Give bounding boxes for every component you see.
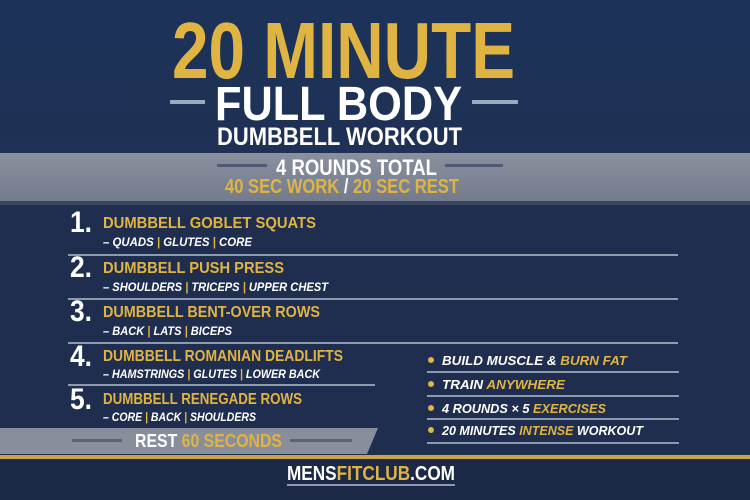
exercise 5: – CORE | BACK | SHOULDERS bbox=[103, 410, 256, 424]
exercise 4: 4. bbox=[70, 340, 92, 373]
exercise 2: DUMBBELL PUSH PRESS bbox=[103, 260, 284, 277]
benefits list: 20 MINUTES INTENSE WORKOUT bbox=[441, 423, 644, 438]
exercise 3: DUMBBELL BENT-OVER ROWS bbox=[103, 304, 320, 321]
title: 20 MINUTE bbox=[172, 6, 515, 95]
panel: rounds band: 4 ROUNDS TOTAL bbox=[276, 155, 437, 180]
exercise 1: 1. bbox=[70, 206, 92, 239]
benefits list: TRAIN ANYWHERE bbox=[442, 377, 565, 392]
exercise 2: – SHOULDERS | TRICEPS | UPPER CHEST bbox=[103, 280, 330, 294]
panel: rounds band bbox=[0, 153, 750, 205]
exercise 4: – HAMSTRINGS | GLUTES | LOWER BACK bbox=[103, 367, 321, 381]
title: DUMBBELL WORKOUT bbox=[217, 123, 462, 151]
benefits list bbox=[427, 353, 679, 444]
panel: rounds band: 40 SEC WORK / 20 SEC REST bbox=[225, 176, 459, 198]
exercise list bbox=[68, 206, 678, 424]
exercise 2 bbox=[70, 251, 330, 294]
exercise 5 bbox=[70, 383, 302, 424]
exercise 2: 2. bbox=[70, 251, 92, 284]
exercise 3: – BACK | LATS | BICEPS bbox=[103, 324, 232, 338]
exercise 5: 5. bbox=[70, 383, 92, 416]
benefits list: BUILD MUSCLE & BURN FAT bbox=[442, 353, 628, 368]
exercise 4: DUMBBELL ROMANIAN DEADLIFTS bbox=[103, 348, 343, 365]
exercise 4 bbox=[70, 340, 343, 381]
benefits list: 4 ROUNDS × 5 EXERCISES bbox=[441, 401, 606, 416]
exercise 3 bbox=[70, 295, 320, 338]
exercise 5: DUMBBELL RENEGADE ROWS bbox=[103, 391, 302, 408]
rest banner: REST 60 SECONDS bbox=[135, 431, 282, 451]
rest banner bbox=[0, 428, 378, 454]
exercise 3: 3. bbox=[70, 295, 92, 328]
exercise 1: – QUADS | GLUTES | CORE bbox=[103, 235, 253, 249]
footer: website: MENSFITCLUB.COM bbox=[287, 463, 455, 485]
title bbox=[170, 6, 518, 151]
exercise 1 bbox=[70, 206, 316, 249]
exercise 1: DUMBBELL GOBLET SQUATS bbox=[103, 215, 316, 232]
title: FULL BODY bbox=[215, 78, 462, 131]
